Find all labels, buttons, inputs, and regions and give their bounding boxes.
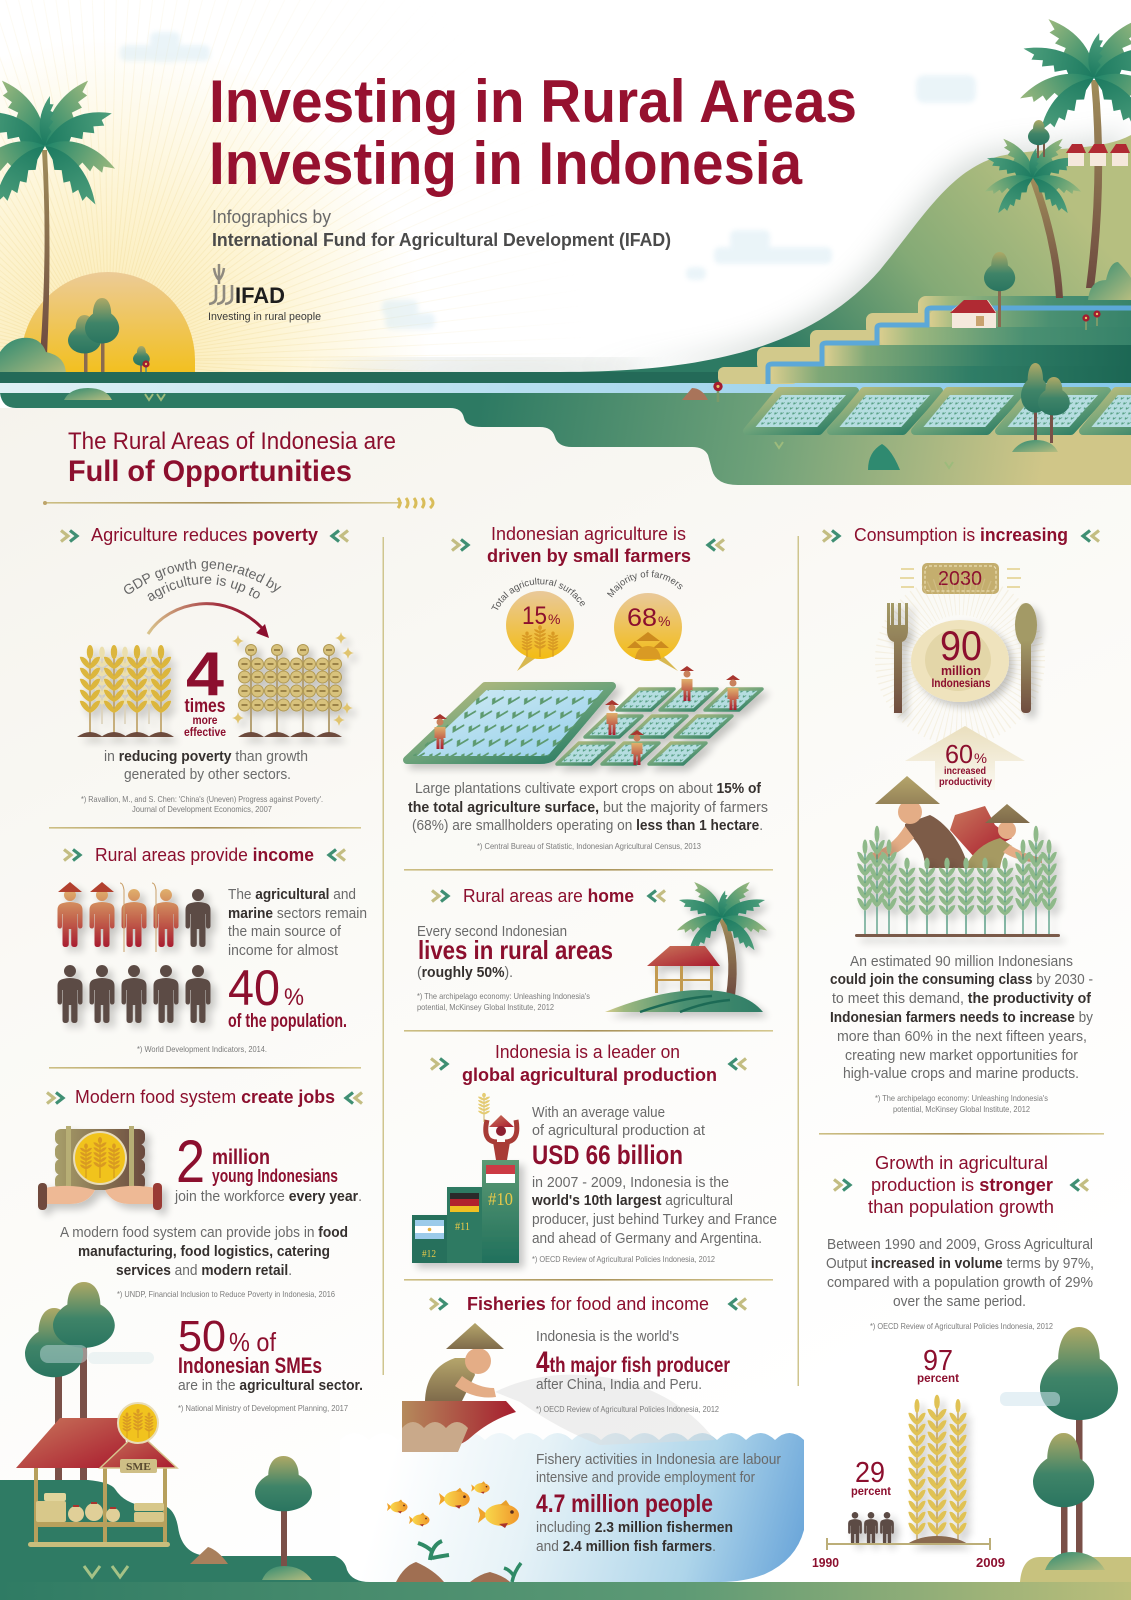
logo: IFAD	[208, 264, 321, 323]
source: home: potential, McKinsey Global Institute, 2012	[417, 1002, 554, 1012]
text: home	[417, 924, 613, 981]
illustration: palm and hut	[605, 880, 768, 1012]
text: consumption: An estimated 90 million Indonesians	[850, 954, 1073, 970]
illustration: fishing net	[495, 1375, 715, 1445]
logo: IFAD: Investing in rural people	[208, 311, 321, 323]
source: consumption	[875, 1093, 1048, 1114]
foreground land	[0, 393, 1131, 485]
heading: growth: Growth in agricultural	[875, 1152, 1048, 1173]
stat: 2 million: 2	[176, 1128, 205, 1195]
text: consumption: high-value crops and marine products.	[843, 1066, 1079, 1082]
text: fishery employment	[536, 1452, 781, 1555]
text: production	[531, 1105, 777, 1247]
illustration: large plantation field	[407, 686, 612, 760]
text: fishery employment: 4.7 million people	[536, 1490, 713, 1518]
illustration: small farm plots	[557, 689, 762, 764]
stat: 97 percent: percent	[917, 1371, 959, 1385]
panel: rural areas are home	[417, 880, 768, 1012]
heading: growth	[834, 1152, 1088, 1217]
text: small farmers: the total agriculture surface, but the majority of farmers	[408, 800, 768, 816]
illustration: fisherman in boat	[402, 1323, 516, 1452]
panel: fisheries	[387, 1293, 781, 1582]
hill shadow	[552, 130, 1123, 367]
pictogram: people	[58, 882, 210, 1023]
bubble: 15% total agricultural surface	[491, 578, 585, 671]
heading: growth: production is stronger	[871, 1174, 1053, 1195]
stat: 50% SMEs: Indonesian SMEs	[178, 1353, 322, 1378]
title: Investing in Rural Areas	[209, 68, 857, 135]
clouds	[120, 32, 976, 329]
logo: IFAD: IFAD	[235, 283, 285, 308]
bubble: 15% total agricultural surface: 15	[522, 602, 547, 630]
panel: consumption is increasing	[823, 524, 1099, 1114]
text: production: and ahead of Germany and Argentina.	[532, 1231, 762, 1247]
panel: global agricultural production	[412, 1041, 777, 1264]
text: consumption: Indonesian farmers needs to increase by	[830, 1010, 1094, 1026]
chart: people bar	[848, 1512, 894, 1544]
text: growth: Output increased in volume terms by 97%,	[826, 1256, 1094, 1272]
bubble: 15% total agricultural surface: %	[548, 611, 560, 627]
text: production: USD 66 billion	[532, 1140, 683, 1170]
source: poverty	[81, 794, 323, 814]
stat: 40%: 40	[228, 960, 280, 1016]
source: small farmers: *) Central Bureau of Statistic, Indonesian Agricultural Census, 2013	[477, 841, 701, 851]
left palm tree	[0, 78, 117, 356]
illustration: farmers	[868, 776, 1042, 868]
text: poverty: in reducing poverty than growth	[104, 749, 308, 765]
source: poverty: *) Ravallion, M., and S. Chen: 'China's (Uneven) Progress against Poverty'.	[81, 794, 323, 804]
text: jobs: manufacturing, food logistics, catering	[78, 1244, 330, 1260]
heading: income: Rural areas provide income	[95, 844, 314, 865]
chart: podium ranks: #12	[422, 1248, 436, 1260]
bubble: 68% majority of farmers	[607, 570, 682, 671]
text: growth: Between 1990 and 2009, Gross Agricultural	[827, 1237, 1093, 1253]
icon: seaweed and rocks	[396, 1541, 521, 1582]
text: jobs	[60, 1225, 348, 1279]
arrow: productivity up	[905, 726, 1025, 790]
water	[340, 1433, 804, 1582]
heading: production	[431, 1041, 746, 1085]
stat: 90 million Indonesians: million	[941, 663, 981, 678]
stat: 29 percent: 29	[855, 1457, 885, 1489]
stat: 90 million Indonesians: Indonesians	[932, 676, 991, 690]
icon: plate fork spoon	[887, 603, 1037, 713]
text: consumption: more than 60% in the next fifteen years,	[837, 1029, 1087, 1045]
text: jobs: A modern food system can provide jobs in food	[60, 1225, 348, 1241]
title	[209, 68, 857, 197]
trees behind market	[25, 1282, 154, 1480]
stat: 97 percent	[917, 1345, 959, 1385]
icon: fish	[387, 1481, 519, 1528]
text: home: lives in rural areas	[418, 935, 613, 965]
text: small farmers	[408, 781, 768, 834]
bubble: 68% majority of farmers: %	[658, 613, 670, 629]
stat: 4 times more effective: 4	[186, 640, 225, 709]
ground: bottom band	[0, 1582, 1131, 1600]
trees at bottom right	[1000, 1327, 1118, 1570]
icon: SME market stall	[16, 1403, 177, 1547]
plate rays	[895, 595, 1025, 725]
text: small farmers: Large plantations cultivate export crops on about 15% of	[415, 781, 761, 797]
panel: growth in agricultural production	[812, 1152, 1094, 1570]
stat: 4 times more effective	[184, 640, 226, 739]
hill village, trees and flowers	[950, 120, 1131, 330]
source: growth: *) OECD Review of Agricultural Policies Indonesia, 2012	[870, 1321, 1053, 1331]
source: home: *) The archipelago economy: Unleashing Indonesia's	[417, 991, 590, 1001]
text: growth	[826, 1237, 1094, 1310]
text: consumption: to meet this demand, the productivity of	[832, 991, 1091, 1007]
panel: small farmers	[403, 523, 770, 851]
icon: farmers on plots	[433, 666, 740, 765]
source: consumption: potential, McKinsey Global Institute, 2012	[893, 1104, 1030, 1114]
panel: modern food system create jobs	[38, 1086, 363, 1413]
ground: right corner	[1020, 1557, 1131, 1582]
stat: 60% increased productivity	[939, 739, 992, 788]
heading: jobs: Modern food system create jobs	[75, 1086, 335, 1107]
text: income: marine sectors remain	[228, 906, 367, 922]
text: fishery employment: Fishery activities in Indonesia are labour	[536, 1452, 781, 1468]
heading: fisheries: Fisheries for food and income	[467, 1293, 709, 1314]
text: income: the main source of	[228, 924, 342, 940]
stat: 29 percent: percent	[851, 1484, 891, 1498]
stat: 2 million: join the workforce every year.	[174, 1189, 362, 1205]
heading: small farmers: Indonesian agriculture is	[491, 523, 686, 544]
source: fisheries: *) OECD Review of Agricultural Policies Indonesia, 2012	[536, 1404, 719, 1414]
heading: small farmers	[452, 523, 724, 566]
green bank and river	[0, 372, 1131, 393]
text: income: income for almost	[228, 943, 338, 959]
riverside details	[64, 363, 1070, 470]
source: home	[417, 991, 590, 1012]
text: production: of agricultural production at	[532, 1123, 705, 1139]
chart: podium ranks: #11	[455, 1219, 470, 1233]
heading: small farmers: driven by small farmers	[487, 545, 691, 566]
text: home: (roughly 50%).	[417, 965, 513, 981]
text: home: Every second Indonesian	[417, 924, 567, 940]
heading: growth: than population growth	[868, 1196, 1054, 1217]
badge: 2030: 2030	[938, 568, 982, 590]
chart: timeline axis	[812, 1538, 1005, 1570]
badge: 2030	[900, 563, 1021, 594]
heading divider with wheat	[43, 498, 433, 508]
chart: wheat bar	[907, 1395, 968, 1544]
stat: 60% increased productivity: productivity	[939, 776, 992, 788]
stat: 50% SMEs: are in the agricultural sector.	[178, 1378, 363, 1394]
bubble: 68% majority of farmers: 68	[627, 604, 657, 632]
hill	[560, 135, 1131, 372]
sun	[21, 272, 195, 372]
text: poverty: generated by other sectors.	[124, 767, 291, 783]
header: sky and sun rays	[0, 0, 1131, 408]
chart: podium ranks: #10	[488, 1189, 513, 1209]
panel: rural areas provide income	[58, 844, 367, 1054]
text: small farmers: (68%) are smallholders operating on less than 1 hectare.	[412, 818, 763, 834]
icon: farmer raising wheat	[478, 1093, 517, 1160]
chart: podium ranks	[412, 1160, 519, 1263]
stat: 2 million: million	[212, 1146, 270, 1169]
tree and rock on bottom ground	[84, 1456, 312, 1580]
stat: 40%	[228, 960, 347, 1032]
stat: 4 times more effective: times	[184, 696, 226, 717]
stat: 60% increased productivity: %	[974, 750, 987, 766]
stat: 2 million	[174, 1128, 362, 1205]
ground: bottom left	[0, 1480, 370, 1582]
illustration: crop row	[855, 826, 1060, 937]
source: SMEs: *) National Ministry of Development Planning, 2017	[178, 1403, 348, 1413]
text: consumption	[830, 954, 1094, 1082]
text: poverty	[104, 749, 308, 783]
stat: 60% increased productivity: increased	[944, 765, 986, 777]
stat: 97 percent: 97	[923, 1345, 953, 1377]
panel: agriculture reduces poverty	[60, 524, 358, 814]
icon: wheat stalks	[77, 645, 174, 737]
text: production: in 2007 - 2009, Indonesia is the	[532, 1175, 729, 1191]
text: growth: compared with a population growth of 29%	[827, 1275, 1093, 1291]
bubble: 68% majority of farmers: Majority of farmers	[607, 570, 682, 598]
text: fishery employment: intensive and provide employment for	[536, 1470, 755, 1486]
rice paddies	[747, 391, 1131, 431]
chart: timeline axis: 1990	[812, 1555, 839, 1570]
subtitle	[212, 207, 671, 250]
stat: 40%: %	[284, 984, 304, 1011]
heading: production: Indonesia is a leader on	[495, 1041, 680, 1062]
stat: 2 million: young Indonesians	[212, 1166, 338, 1186]
source: production: *) OECD Review of Agricultural Policies Indonesia, 2012	[532, 1254, 715, 1264]
text: consumption: creating new market opportunities for	[845, 1048, 1078, 1064]
stat: 50% SMEs: % of	[229, 1327, 277, 1357]
text: income	[228, 887, 367, 959]
text: consumption: could join the consuming class by 2030 -	[830, 972, 1093, 988]
source: income: *) World Development Indicators, 2014.	[137, 1044, 267, 1054]
chart: timeline axis: 2009	[976, 1555, 1005, 1570]
icon: coin stalks	[232, 632, 354, 737]
section heading: The Rural Areas of Indonesia are	[68, 428, 396, 455]
curved caption: agriculture is up to	[148, 574, 260, 601]
heading: production: global agricultural production	[462, 1064, 717, 1085]
text: income: The agricultural and	[228, 887, 356, 903]
heading: poverty: Agriculture reduces poverty	[91, 524, 319, 545]
heading: consumption: Consumption is increasing	[854, 524, 1068, 545]
stat: 4 times more effective: more	[192, 715, 218, 727]
text: fishery employment: and 2.4 million fish farmers.	[536, 1539, 716, 1555]
title: Investing in Indonesia	[209, 130, 803, 197]
heading: home: Rural areas are home	[463, 885, 634, 906]
text: fish producer: after China, India and Peru.	[536, 1377, 702, 1393]
source: jobs: *) UNDP, Financial Inclusion to Reduce Poverty in Indonesia, 2016	[117, 1289, 335, 1299]
text: growth: over the same period.	[893, 1294, 1026, 1310]
stat: 50% SMEs: 50	[178, 1312, 226, 1361]
text: production: world's 10th largest agricultural	[531, 1193, 733, 1209]
text: jobs: services and modern retail.	[116, 1263, 292, 1279]
stat: 90 million Indonesians: 90	[940, 622, 982, 669]
stat: 4 times more effective: effective	[184, 727, 226, 739]
left trees and bush	[0, 298, 150, 390]
text: fish producer: 4th major fish producer	[536, 1346, 730, 1379]
text: fish producer: Indonesia is the world's	[536, 1329, 679, 1345]
source: consumption: *) The archipelago economy: Unleashing Indonesia's	[875, 1093, 1048, 1103]
text: production: With an average value	[532, 1105, 665, 1121]
stat: 50% SMEs	[178, 1312, 363, 1394]
icon: crate in hands	[38, 1126, 162, 1210]
column dividers	[382, 536, 799, 1386]
stat: 60% increased productivity: 60	[945, 739, 973, 769]
arrow: curved red	[148, 604, 269, 638]
terraces	[718, 296, 1131, 384]
subtitle: International Fund for Agricultural Development (IFAD)	[212, 230, 671, 250]
subtitle: Infographics by	[212, 207, 331, 227]
icon: SME market stall: SME	[126, 1462, 151, 1473]
bubble: 15% total agricultural surface: Total agricultural surface	[491, 578, 585, 610]
stat: 90 million Indonesians	[932, 622, 991, 690]
text: fish producer	[536, 1329, 730, 1393]
text: production: producer, just behind Turkey and France	[532, 1212, 777, 1228]
section heading: Full of Opportunities	[68, 455, 352, 488]
stat: 29 percent	[851, 1457, 891, 1498]
curved caption: GDP growth generated by	[124, 559, 282, 594]
source: poverty: Journal of Development Economics, 2007	[132, 804, 272, 814]
text: fishery employment: including 2.3 million fishermen	[536, 1520, 733, 1536]
section heading	[68, 428, 396, 488]
palms on the hill	[983, 16, 1131, 298]
stat: 40%: of the population.	[228, 1011, 347, 1032]
